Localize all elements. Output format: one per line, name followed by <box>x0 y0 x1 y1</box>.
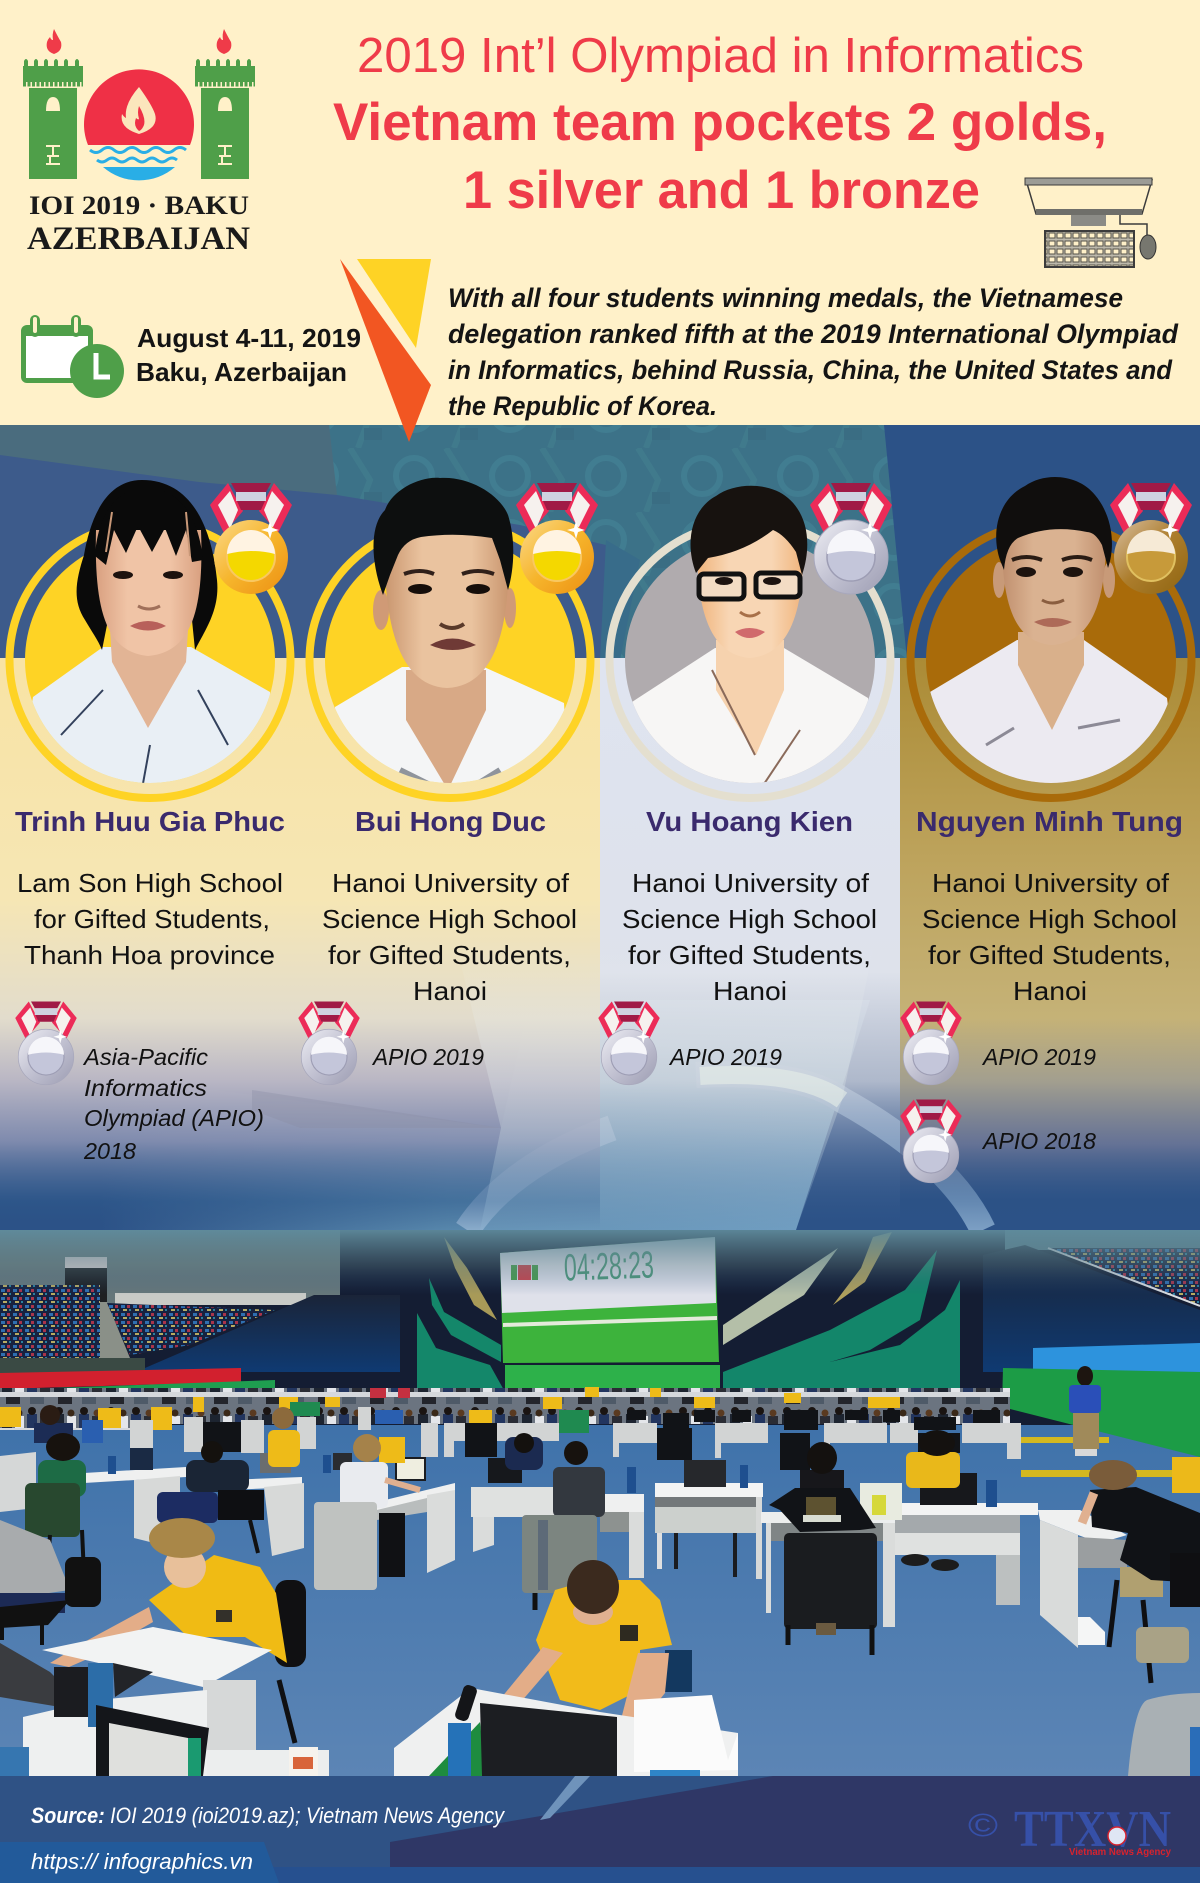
logo: IOI 2019 Baku: AZERBAIJAN <box>27 221 250 257</box>
icon: left tower <box>23 59 83 179</box>
student 3 card text: Vu Hoang Kien <box>646 806 853 837</box>
medal label, student 4 second: APIO 2018 <box>981 1128 1096 1154</box>
title: 1 silver and 1 bronze <box>463 161 980 220</box>
student 2 card text <box>322 806 577 1006</box>
hall: foreground contestant centre <box>394 1560 738 1776</box>
student 4 card text: Nguyen Minh Tung <box>916 806 1183 837</box>
hall: far rows of contestants <box>0 1387 1010 1443</box>
portrait: Trinh Huu Gia Phuc <box>10 480 290 800</box>
hall: floor markings <box>1021 1437 1174 1477</box>
icon: silver medal <box>810 483 892 594</box>
icon: small silver medal, student 2 <box>298 1002 360 1085</box>
summary paragraph: the Republic of Korea. <box>448 391 717 421</box>
photo: competition hall <box>0 1230 1200 1776</box>
header background <box>0 0 1200 425</box>
student 1 card text <box>15 806 285 970</box>
summary paragraph: delegation ranked fifth at the 2019 International Olympiad <box>448 319 1178 349</box>
logo: TTXVN: Vietnam News Agency <box>1069 1847 1171 1858</box>
student 1 card text: Lam Son High School <box>17 868 283 898</box>
student 3 card text: Science High School <box>622 904 877 934</box>
student 4 card text: Science High School <box>922 904 1177 934</box>
title: Vietnam team pockets 2 golds, <box>333 93 1107 152</box>
column tint: silver <box>600 658 900 1230</box>
medal label, student 1: Informatics <box>84 1075 208 1101</box>
hall: foreground person right <box>1128 1693 1200 1776</box>
panel: footer <box>0 1776 1200 1883</box>
medal label, student 1: 2018 <box>83 1138 136 1164</box>
icon: torch flames <box>47 29 231 54</box>
icon: gold medal 1 <box>210 483 292 594</box>
icon: small silver medal, student 4 second <box>900 1100 962 1183</box>
hall: back row chairs and monitors <box>203 1410 1000 1470</box>
icon: bronze medal <box>1110 483 1192 594</box>
student 3 card text: Hanoi University of <box>632 868 870 898</box>
title <box>333 29 1107 220</box>
date and place: August 4-11, 2019 <box>137 323 361 353</box>
student 1 card text: Thanh Hoa province <box>24 940 275 970</box>
icon: desktop computer <box>1025 178 1156 267</box>
source line: Source: IOI 2019 (ioi2019.az); Vietnam News Agency <box>31 1803 506 1828</box>
student 2 card text: Science High School <box>322 904 577 934</box>
portrait: Vu Hoang Kien <box>610 486 890 800</box>
student 4 card text: for Gifted Students, <box>928 940 1171 970</box>
medal label, student 2: APIO 2019 <box>371 1044 484 1070</box>
student 3 card text: Hanoi <box>713 976 787 1006</box>
hall: middle row desks <box>0 1452 1127 1648</box>
hall: right stand <box>983 1230 1200 1457</box>
medal label, student 4 first: APIO 2019 <box>981 1044 1096 1070</box>
student 2 card text: Hanoi University of <box>332 868 570 898</box>
hall: foreground contestant left <box>0 1518 329 1776</box>
hall: left stand <box>0 1233 400 1388</box>
summary paragraph: With all four students winning medals, the Vietnamese <box>448 283 1123 313</box>
student 1 card text: for Gifted Students, <box>34 904 270 934</box>
title: 2019 Int’l Olympiad in Informatics <box>357 29 1084 83</box>
panel: students background <box>0 425 1200 1230</box>
medal label, student 1: Asia-Pacific <box>82 1044 209 1070</box>
hall: back row desks <box>130 1407 1021 1459</box>
decorative arrow: yellow and orange triangles <box>340 259 431 442</box>
hall: green wall and screen: 04:28:23 <box>563 1244 655 1290</box>
icon: small silver medal, student 1 <box>15 1002 77 1085</box>
copyright mark: © <box>968 1807 999 1843</box>
hall: green wall and screen <box>417 1232 960 1393</box>
student 1 card text: Trinh Huu Gia Phuc <box>15 806 285 837</box>
column tint: gold 1 <box>0 658 300 1230</box>
student 2 card text: Hanoi <box>413 976 487 1006</box>
icon: small silver medal, student 3 <box>598 1002 660 1085</box>
date and place <box>136 323 361 387</box>
date and place: Baku, Azerbaijan <box>136 357 347 387</box>
student 2 card text: Bui Hong Duc <box>355 806 546 837</box>
logo text: IOI 2019 · BAKU <box>29 191 249 220</box>
summary paragraph: in Informatics, behind Russia, China, the United States and <box>448 355 1172 385</box>
icon: calendar and clock <box>21 315 124 398</box>
student 3 card text: for Gifted Students, <box>628 940 871 970</box>
summary paragraph <box>448 283 1178 421</box>
medal label, student 3: APIO 2019 <box>668 1044 782 1070</box>
column tint: bronze <box>900 658 1200 1230</box>
medal label, student 1 <box>82 1044 264 1164</box>
hall: laptops and bottles <box>108 1448 997 1520</box>
logo: TTXVN: TTXVN <box>1014 1801 1171 1858</box>
icon: sun and sea emblem <box>84 69 194 180</box>
student 4 card text: Hanoi <box>1013 976 1087 1006</box>
column tint: gold 2 <box>300 658 600 1230</box>
hall: seated contestants, middle row <box>0 1407 1200 1683</box>
icon: right tower <box>195 59 255 179</box>
logo: IOI 2019 Baku <box>23 29 255 257</box>
student 4 card text: Hanoi University of <box>932 868 1170 898</box>
medal label, student 1: Olympiad (APIO) <box>84 1105 264 1131</box>
portrait: Bui Hong Duc <box>310 478 590 800</box>
hall: standing supervisor <box>1069 1366 1101 1456</box>
student 3 card text <box>622 806 877 1006</box>
portrait: Nguyen Minh Tung <box>910 477 1192 800</box>
student 4 card text <box>916 806 1183 1006</box>
icon: gold medal 2 <box>516 483 598 594</box>
icon: small silver medal, student 4 first <box>900 1002 962 1085</box>
student 2 card text: for Gifted Students, <box>328 940 571 970</box>
website link: https:// infographics.vn <box>31 1849 253 1874</box>
